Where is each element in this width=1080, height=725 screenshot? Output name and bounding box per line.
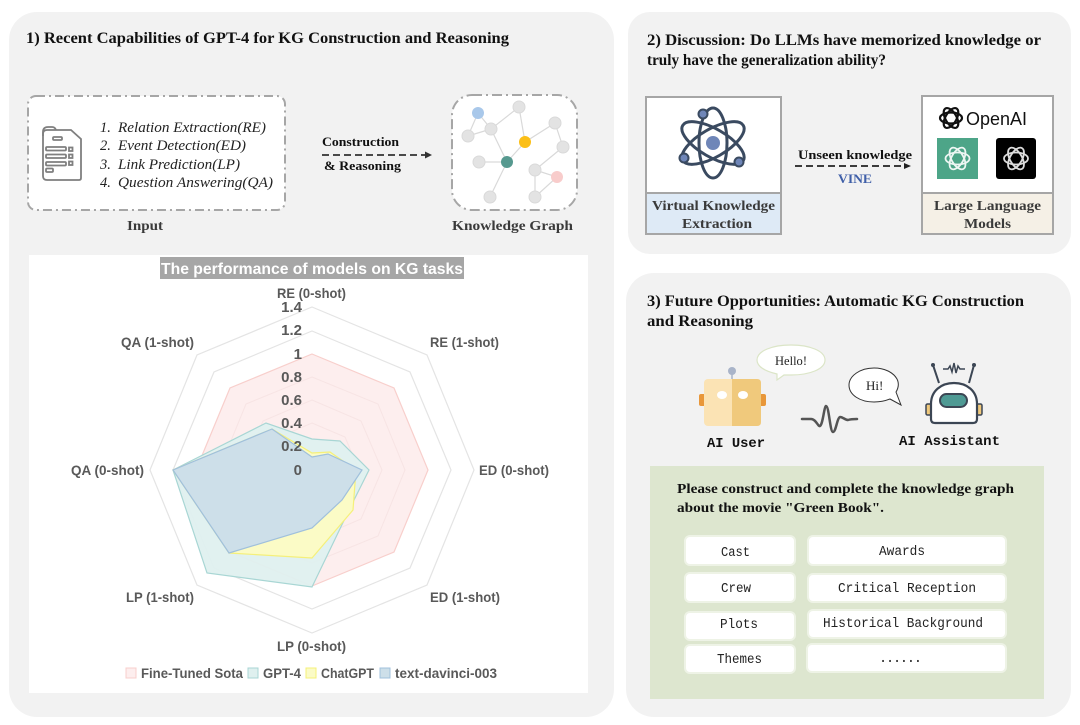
panel: recent capabilities of GPT-4 [9,12,614,717]
heading: panel 3: and Reasoning [647,313,753,330]
axis tick labels: 0.4 [281,415,303,432]
chip: Plots: Plots [720,618,758,633]
radar chart panel [29,255,588,693]
arrow: unseen knowledge via VINE [795,147,912,186]
icon: clipboard document [43,127,81,180]
prompt text: Please construct and complete the knowledge graph [677,482,1014,497]
panel: future opportunities [626,273,1071,717]
task list: Event Detection(ED) [117,138,246,154]
chip: Plots [685,612,795,640]
axis category labels: ED (1-shot) [430,589,500,605]
axis tick labels: 1.4 [281,299,303,316]
chip: Awards [808,536,1006,565]
prompt panel [650,466,1044,699]
chip: Crew: Crew [721,582,751,597]
axis category labels: RE (0-shot) [277,285,346,301]
heading: panel 3 [647,293,1024,330]
axis category labels: QA (0-shot) [71,462,144,478]
heading: panel 1: 1) Recent Capabilities of GPT-4 for KG Construction and Reasoning [26,30,509,47]
chip: Cast: Cast [721,546,750,561]
task list: Question Answering(QA) [118,175,273,191]
axis tick labels: 1.2 [281,322,302,339]
axis tick labels [281,299,303,479]
arrow: construction and reasoning: & Reasoning [324,158,402,173]
card: large language models [922,96,1053,234]
prompt text [677,482,1014,516]
chart title: The performance of models on KG tasks [161,261,463,278]
series: text-davinci-003 [173,429,362,553]
icon: ChatGPT green [937,138,978,179]
speech bubble: Hi: Hi! [866,378,883,393]
radar grid outer [150,307,474,633]
legend: GPT-4 [263,665,301,681]
chip: Cast [685,536,795,565]
axis tick labels: 0.2 [281,438,302,455]
label: AI User: AI User [707,436,765,452]
chip: Historical Background [808,610,1006,638]
chip: Themes: Themes [717,653,762,668]
card: virtual knowledge extraction [646,97,781,234]
icon: AI user robot [699,367,766,426]
card: large language models: Large Language [934,199,1041,214]
axis tick labels: 0.6 [281,392,302,409]
input task box [28,96,285,210]
axis category labels: LP (1-shot) [126,589,194,605]
arrow: construction and reasoning: Construction [322,134,400,149]
heading: panel 2 [647,32,1041,69]
chip: Crew [685,573,795,602]
heading: panel 2: truly have the generalization ability? [647,52,886,69]
chip: ellipsis [807,644,1006,672]
label: input: Input [127,219,163,234]
legend: Fine-Tuned Sota [141,665,243,681]
panel: discussion [628,12,1071,254]
task list: 1. [100,120,111,136]
axis category labels: QA (1-shot) [121,334,194,350]
chip: Awards: Awards [879,545,925,560]
radar grid inner [219,377,405,563]
axis tick labels: 1 [294,346,302,363]
axis category labels: ED (0-shot) [479,462,549,478]
card: large language models: Models [964,217,1012,232]
knowledge graph diagram [452,95,577,210]
heading: panel 3: 3) Future Opportunities: Automatic KG Construction [647,293,1024,310]
task list: Relation Extraction(RE) [117,120,266,136]
chip: Critical Reception [808,574,1006,602]
series: Fine-Tuned Sota [196,354,428,586]
chip: Themes [685,645,795,673]
axis category labels: LP (0-shot) [277,638,346,654]
speech bubble: Hello [757,345,825,380]
icon: ChatGPT black [996,138,1036,179]
arrow: construction and reasoning [322,134,432,173]
label: AI Assistant: AI Assistant [899,434,1000,450]
icon: signal wave [802,406,857,432]
icon: AI assistant robot [926,363,982,423]
card: virtual knowledge extraction: Virtual Knowledge [652,199,775,214]
chip: Critical Reception: Critical Reception [838,582,976,597]
prompt text: about the movie "Green Book". [677,501,884,516]
heading: panel 2: 2) Discussion: Do LLMs have memorized knowledge or [647,32,1041,49]
speech bubble: Hello: Hello! [775,353,807,368]
task list: 3. [99,157,111,173]
chip: ellipsis: ...... [879,652,922,667]
series: GPT-4 [173,423,369,587]
axis tick labels: 0 [294,462,302,479]
label: knowledge graph: Knowledge Graph [452,219,573,234]
task list: 4. [100,175,111,191]
legend: text-davinci-003 [395,665,497,681]
chip: Historical Background: Historical Background [823,617,983,632]
speech bubble: Hi [849,368,901,405]
legend: ChatGPT [321,665,374,681]
task list: Link Prediction(LP) [117,157,240,173]
task list [99,120,273,191]
legend [126,665,497,681]
series: ChatGPT [173,429,356,558]
axis category labels: RE (1-shot) [430,334,499,350]
task list: 2. [100,138,111,154]
card: virtual knowledge extraction: Extraction [682,217,752,232]
icon: OpenAI logo: OpenAI [966,109,1027,129]
axis category labels [71,285,549,654]
arrow: unseen knowledge via VINE: Unseen knowledge [798,147,912,162]
icon: atom [676,108,750,178]
arrow: unseen knowledge via VINE: VINE [838,171,872,186]
axis tick labels: 0.8 [281,369,302,386]
